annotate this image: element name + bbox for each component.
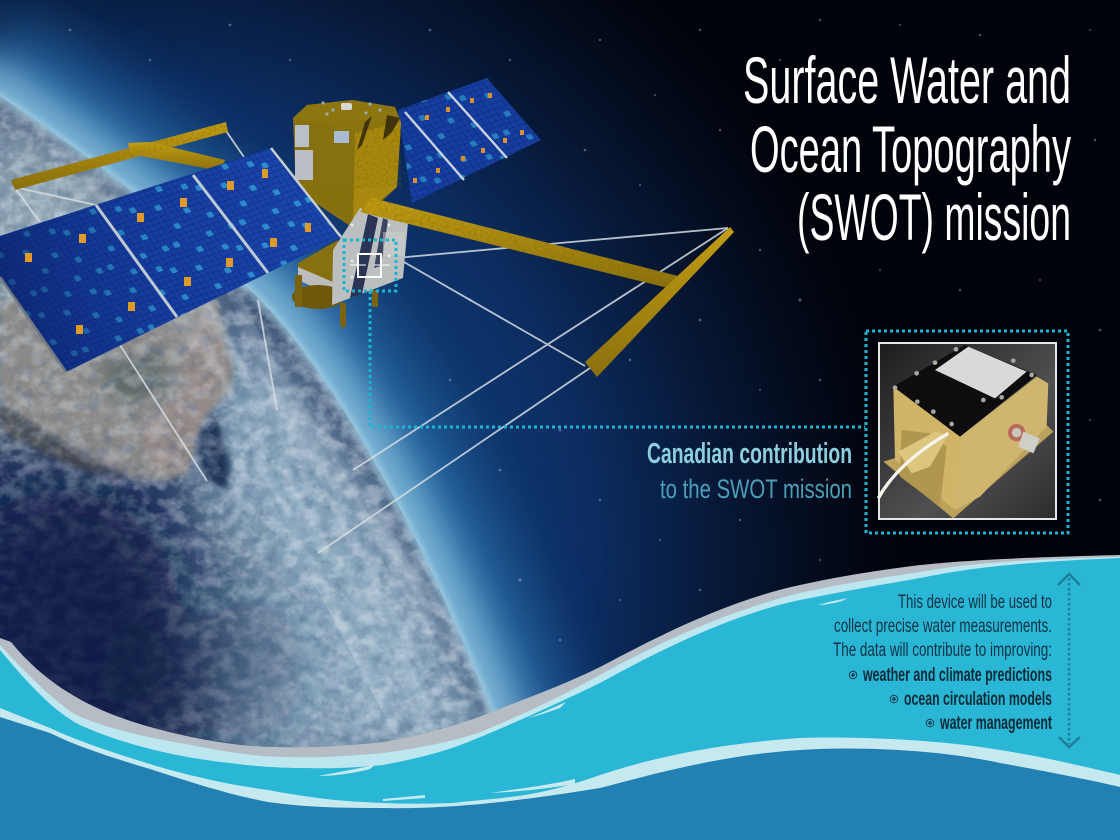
spacecraft bus xyxy=(293,100,401,228)
pale streaks xyxy=(318,598,848,801)
caption: Canadian contribution xyxy=(647,438,852,504)
grey band xyxy=(0,555,1120,840)
cloud texture xyxy=(0,100,492,748)
caption: Canadian contribution: to the SWOT mission xyxy=(660,474,852,504)
dotted callout box on satellite with leader line xyxy=(344,240,865,427)
wave bands xyxy=(0,555,1120,840)
rear solar panel xyxy=(398,78,541,203)
target marker xyxy=(350,254,390,277)
device photo xyxy=(878,343,1056,519)
earth globe xyxy=(0,96,492,748)
night ocean xyxy=(0,490,300,750)
dark ocean patch xyxy=(198,415,230,490)
antenna support lines xyxy=(14,128,728,553)
caption: Canadian contribution: Canadian contribution xyxy=(647,438,852,470)
description text: This device will be used to xyxy=(898,591,1052,613)
title xyxy=(743,43,1071,254)
lower pale band xyxy=(0,708,1120,840)
double-headed dotted arrow xyxy=(1058,574,1080,747)
dotted frame around device photo xyxy=(866,331,1068,533)
front solar panel xyxy=(0,148,341,372)
satellite xyxy=(0,78,734,377)
pale band xyxy=(0,557,1120,840)
description text xyxy=(833,591,1052,734)
dark base band xyxy=(0,717,1120,840)
star field xyxy=(69,19,1101,641)
right antenna boom xyxy=(360,198,734,377)
left antenna boom xyxy=(11,122,228,190)
lower module xyxy=(292,240,378,329)
streaked cloud band xyxy=(174,294,480,739)
instrument panel xyxy=(332,208,408,305)
description text: water management xyxy=(939,712,1052,734)
teal band xyxy=(0,558,1120,840)
lit limb of the globe xyxy=(0,78,510,760)
land mass xyxy=(0,300,233,482)
